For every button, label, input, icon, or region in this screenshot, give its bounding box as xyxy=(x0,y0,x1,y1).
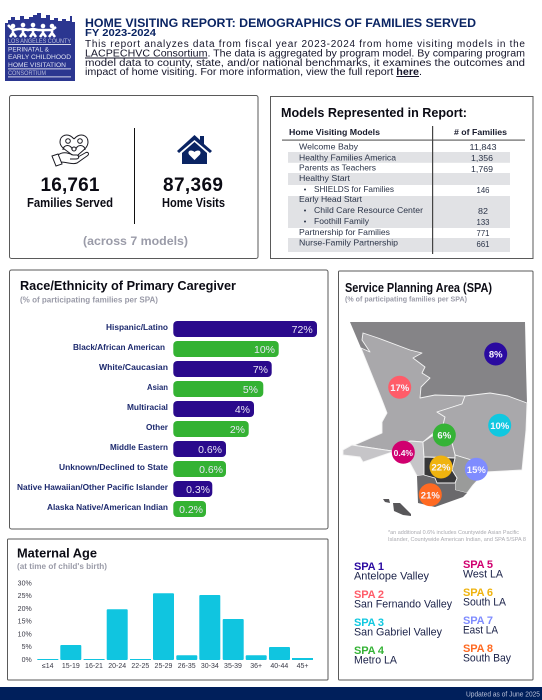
bar chart: race: 2% xyxy=(230,424,245,436)
panel: race and ethnicity xyxy=(10,270,328,529)
SPA legend: SPA 1 xyxy=(354,561,384,573)
SPA legend: San Gabriel Valley xyxy=(354,626,442,638)
logo: PERINATAL & xyxy=(8,48,49,54)
bar chart: race: Native Hawaiian/Other Pacific Islander xyxy=(17,483,168,492)
bar chart: race: Alaska Native/American Indian xyxy=(47,503,168,512)
maternal age heading: Maternal Age xyxy=(17,546,97,561)
SPA legend: SPA 8 xyxy=(463,643,493,655)
bar chart: maternal age: 40-44 xyxy=(270,663,288,670)
logo: HOME VISITATION xyxy=(8,63,66,69)
SPA legend xyxy=(354,559,511,666)
bar chart: race: 72% xyxy=(292,324,313,336)
SPA legend: SPA 7 xyxy=(463,615,493,627)
bar chart: race: 10% xyxy=(254,344,275,356)
bar chart: maternal age: 30% xyxy=(18,580,32,587)
map footnote: *an additional 0.6% includes Countywide Asian Pacific xyxy=(388,530,520,536)
bar chart: race: Middle Eastern xyxy=(110,443,168,452)
table rows: 133 xyxy=(476,217,490,227)
table rows: 1,769 xyxy=(471,164,493,174)
table rows: Nurse-Family Partnership xyxy=(299,238,398,248)
bar chart: race: 5% xyxy=(243,384,258,396)
map markers: 22% xyxy=(431,462,451,474)
SPA heading: Service Planning Area (SPA) xyxy=(345,280,492,295)
bar chart: race: 0.3% xyxy=(186,484,210,496)
panel: maternal age xyxy=(8,539,328,680)
bar chart: race: 7% xyxy=(253,364,268,376)
table header: # of Families xyxy=(454,127,507,137)
bar chart: maternal age: 20% xyxy=(18,606,32,613)
maternal age subheading: (at time of child's birth) xyxy=(17,562,107,571)
bar chart: race: 4% xyxy=(235,404,250,416)
note: across 7 models: (across 7 models) xyxy=(83,234,188,248)
map markers: 0.4% xyxy=(394,448,413,458)
SPA legend: Antelope Valley xyxy=(354,570,429,582)
logo xyxy=(5,13,75,81)
bar chart: race: Multiracial xyxy=(127,403,168,412)
divider xyxy=(134,128,135,224)
bar chart: race: Asian xyxy=(147,383,168,392)
SPA legend: SPA 3 xyxy=(354,617,384,629)
map markers: 17% xyxy=(390,383,410,394)
SPA legend: West LA xyxy=(463,568,504,580)
SPA legend: South Bay xyxy=(463,652,511,664)
map markers: 21% xyxy=(421,490,440,502)
bar chart: maternal age: 0% xyxy=(22,657,32,664)
map footnote: Islander, Countywide American Indian, and SPA 5/SPA 8 xyxy=(388,537,526,543)
bar chart: maternal age: 30-34 xyxy=(201,663,219,670)
table rows: Welcome Baby xyxy=(299,142,359,152)
icon: hand holding heart family xyxy=(52,135,88,166)
table rows: 1,356 xyxy=(471,153,493,163)
stat: home visits: 87,369 xyxy=(163,175,223,196)
SPA subheading: (% of participating families per SPA) xyxy=(345,297,467,304)
bar chart: race: Hispanic/Latino xyxy=(106,323,168,332)
bar chart: maternal age: 26-35 xyxy=(178,663,196,670)
table rows: Parents as Teachers xyxy=(299,163,376,173)
SPA legend: SPA 5 xyxy=(463,559,493,571)
bar chart: maternal age: ≤14 xyxy=(42,663,54,670)
map markers xyxy=(388,342,511,506)
table rows: Early Head Start xyxy=(299,194,363,204)
table rows: Healthy Start xyxy=(299,173,351,183)
SPA legend: Metro LA xyxy=(354,654,398,666)
SPA legend: East LA xyxy=(463,624,499,636)
panel: totals xyxy=(10,96,258,258)
bar chart: maternal age: 16-21 xyxy=(85,663,103,670)
bar chart: race xyxy=(17,321,317,517)
models heading: Models Represented in Report: xyxy=(281,105,467,120)
table rows: 661 xyxy=(476,239,490,249)
bar chart: maternal age: 20-24 xyxy=(108,663,126,670)
table rows: 11,843 xyxy=(470,142,497,152)
SPA legend: SPA 4 xyxy=(354,645,385,657)
bar chart: maternal age: 45+ xyxy=(297,663,308,670)
bar chart: maternal age xyxy=(18,580,313,670)
panel: service planning area xyxy=(338,271,533,680)
bar chart: maternal age: 15% xyxy=(18,619,32,626)
table stripes xyxy=(288,152,510,252)
intro paragraph: LACPECHVC Consortium . The data is aggregated by program model. By comparing program xyxy=(85,48,525,60)
icon: house with heart xyxy=(177,135,212,164)
map markers: 15% xyxy=(467,465,486,476)
bar chart: race: Unknown/Declined to State xyxy=(59,463,169,472)
table rows: 82 xyxy=(478,206,488,216)
map markers: 8% xyxy=(489,350,503,360)
map markers: 6% xyxy=(437,430,452,442)
panel: models table xyxy=(270,96,533,258)
map: Los Angeles County SPAs xyxy=(343,322,527,516)
table header xyxy=(289,127,507,137)
intro paragraph: This report analyzes data from fiscal year 2023-2024 from home visiting models in the xyxy=(85,39,525,50)
table rows: 146 xyxy=(476,185,490,195)
table rows: Healthy Families America xyxy=(299,152,396,162)
fiscal year subtitle: FY 2023-2024 xyxy=(85,28,156,39)
bar chart: maternal age: 5% xyxy=(22,644,32,651)
bar chart: maternal age: 35-39 xyxy=(224,663,242,670)
bar chart: maternal age: 10% xyxy=(18,631,32,638)
bar chart: race: 0.6% xyxy=(198,444,222,456)
map markers: 10% xyxy=(490,421,510,432)
SPA legend: San Fernando Valley xyxy=(354,598,452,610)
table rows: Partnership for Families xyxy=(299,227,390,237)
bar chart: maternal age: 25-29 xyxy=(155,663,173,670)
table rows: Child Care Resource Center xyxy=(314,205,423,215)
stat: families served: Families Served xyxy=(27,195,113,210)
bar chart: race: White/Caucasian xyxy=(99,363,168,372)
intro paragraph: model data to county, state, and/or national benchmarks, it examines the outcomes and xyxy=(85,58,525,69)
table rows: 771 xyxy=(476,228,490,238)
footer bar xyxy=(0,687,542,700)
logo: CONSORTIUM xyxy=(8,71,46,77)
table header: Home Visiting Models xyxy=(289,127,380,137)
bar chart: race: 0.2% xyxy=(179,504,203,516)
intro paragraph: impact of home visiting. For more information, view the full report here. xyxy=(85,67,422,78)
bar chart: maternal age: 36+ xyxy=(250,663,262,670)
stat: home visits xyxy=(162,175,225,210)
logo: LOS ANGELES COUNTY xyxy=(8,39,71,45)
logo: EARLY CHILDHOOD xyxy=(8,55,72,61)
table rows xyxy=(299,142,497,249)
bar chart: maternal age: 15-19 xyxy=(62,663,80,670)
SPA legend: SPA 2 xyxy=(354,589,384,601)
title: HOME VISITING REPORT: DEMOGRAPHICS OF FAMILIES SERVED xyxy=(85,16,476,30)
intro paragraph xyxy=(85,39,525,78)
stat: home visits: Home Visits xyxy=(162,195,225,210)
map footnote xyxy=(388,530,526,543)
table rows: Foothill Family xyxy=(314,216,370,226)
SPA legend: SPA 6 xyxy=(463,587,493,599)
race subheading: (% of participating families per SPA) xyxy=(20,296,158,305)
bar chart: race: Black/African American xyxy=(73,343,165,352)
stat: families served: 16,761 xyxy=(40,175,100,196)
bar chart: race: 0.6% xyxy=(199,464,223,476)
footer bar: Updated as of June 2025 xyxy=(466,692,540,699)
bar chart: maternal age: 25% xyxy=(18,593,32,600)
stat: families served xyxy=(27,175,113,210)
race heading: Race/Ethnicity of Primary Caregiver xyxy=(20,278,236,293)
bar chart: race: Other xyxy=(146,423,168,432)
bar chart: maternal age: 22-25 xyxy=(131,663,149,670)
table rows: SHIELDS for Families xyxy=(314,184,394,194)
SPA legend: South LA xyxy=(463,596,507,608)
